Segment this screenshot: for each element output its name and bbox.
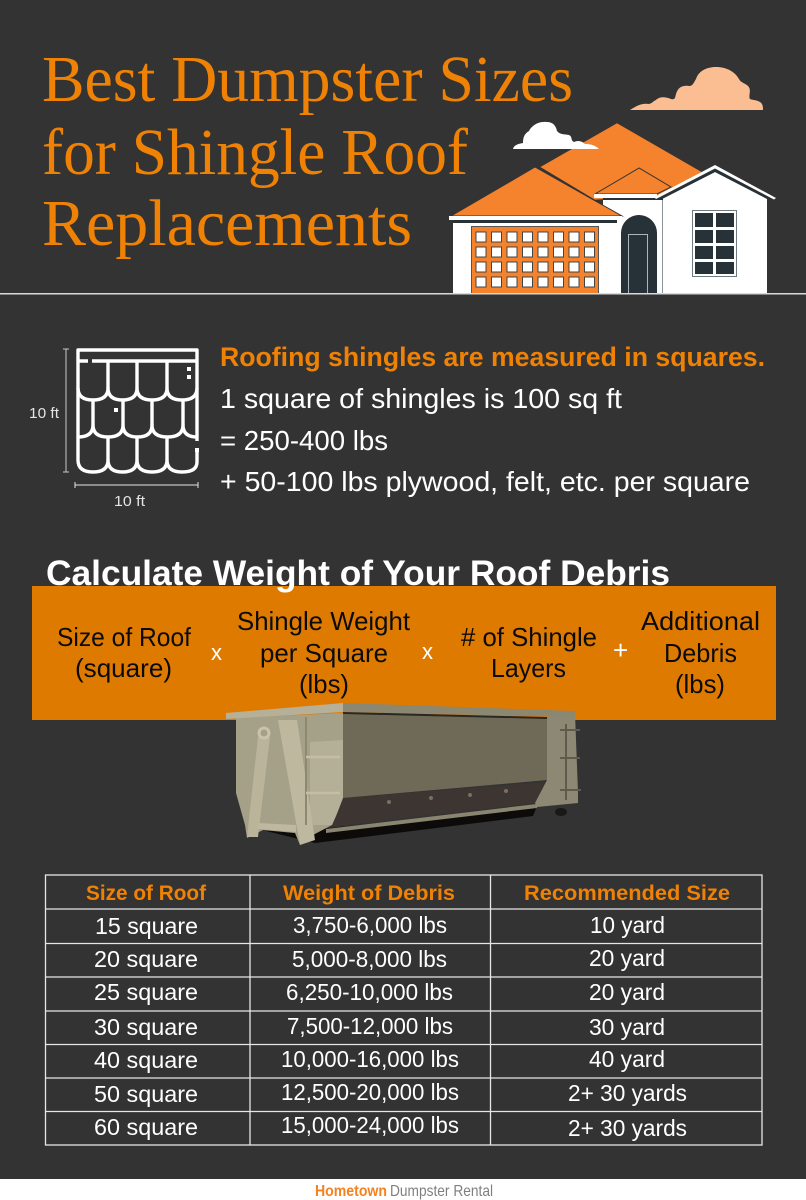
dimension: width: 10 ft bbox=[114, 493, 146, 510]
formula: shingle weight: (lbs) bbox=[299, 669, 349, 699]
column: size of roof: 25 square bbox=[94, 979, 198, 1005]
formula: size of roof: Size of Roof bbox=[57, 622, 192, 652]
column: recommended size: 20 yard bbox=[589, 979, 665, 1005]
text block: shingle measurement: = 250-400 lbs bbox=[220, 425, 388, 456]
table header: Weight of Debris bbox=[283, 882, 455, 905]
dumpster rear end bbox=[535, 713, 578, 807]
column: size of roof bbox=[94, 913, 198, 1140]
column: recommended size: 40 yard bbox=[589, 1046, 665, 1072]
right wall bbox=[662, 172, 767, 293]
column: recommended size bbox=[568, 912, 687, 1141]
column: weight of debris: 10,000-16,000 lbs bbox=[281, 1046, 459, 1072]
text block: shingle measurement: 1 square of shingles is 100 sq ft bbox=[220, 383, 622, 414]
dumpster bolts bbox=[387, 789, 508, 804]
formula: additional debris: Additional bbox=[641, 606, 760, 636]
dumpster hoist arms bbox=[247, 737, 270, 837]
footer: brand strip: Dumpster Rental bbox=[390, 1183, 493, 1200]
table header: Recommended Size bbox=[524, 882, 730, 905]
title: Best Dumpster Sizes bbox=[42, 43, 573, 116]
dumpster end face bbox=[236, 713, 343, 845]
operator: times: x bbox=[211, 640, 222, 665]
garage eave bbox=[449, 216, 622, 220]
column: size of roof: 15 square bbox=[95, 913, 198, 939]
column: weight of debris: 15,000-24,000 lbs bbox=[281, 1112, 459, 1138]
column: weight of debris: 7,500-12,000 lbs bbox=[287, 1013, 453, 1039]
column: recommended size: 30 yard bbox=[589, 1014, 665, 1040]
illustration: dumpster bbox=[226, 703, 581, 845]
formula: shingle layers: # of Shingle bbox=[461, 622, 597, 652]
column: recommended size: 10 yard bbox=[590, 912, 665, 938]
garage wall bbox=[453, 222, 617, 293]
panel: weight formula band bbox=[32, 586, 776, 720]
formula: shingle layers bbox=[461, 622, 597, 683]
operator: times: x bbox=[422, 639, 433, 664]
text block: shingle measurement: Roofing shingles are measured in squares. bbox=[220, 342, 765, 372]
title bbox=[42, 43, 573, 260]
dimension: width bbox=[75, 482, 198, 510]
garage roof bbox=[451, 167, 622, 216]
formula: additional debris: (lbs) bbox=[675, 669, 725, 699]
column: size of roof: 40 square bbox=[94, 1047, 198, 1073]
column: size of roof: 20 square bbox=[94, 946, 198, 972]
formula: shingle layers: Layers bbox=[491, 653, 566, 683]
column: size of roof: 30 square bbox=[94, 1014, 198, 1040]
garage door bbox=[472, 226, 598, 294]
dumpster rail bbox=[326, 804, 537, 833]
icon: peach cloud bbox=[630, 67, 763, 110]
column: weight of debris: 12,500-20,000 lbs bbox=[281, 1079, 459, 1105]
column: weight of debris: 6,250-10,000 lbs bbox=[286, 979, 453, 1005]
column: weight of debris: 5,000-8,000 lbs bbox=[292, 946, 447, 972]
table grid bbox=[46, 875, 762, 1145]
dimension: height: 10 ft bbox=[29, 405, 60, 422]
dumpster side shadow bbox=[262, 806, 537, 843]
heading: calculate weight: Calculate Weight of Your Roof Debris bbox=[46, 554, 670, 593]
illustration: house bbox=[449, 122, 776, 293]
back roof bbox=[540, 123, 702, 200]
icon: shingle square diagram bbox=[78, 350, 199, 472]
right gable trim bbox=[660, 168, 771, 200]
dumpster rear hinges bbox=[560, 724, 581, 800]
front door arch bbox=[621, 215, 657, 294]
title: for Shingle Roof bbox=[42, 116, 468, 189]
dumpster side panel bbox=[343, 713, 547, 798]
operator: plus: + bbox=[613, 635, 628, 665]
dumpster top rim bbox=[226, 703, 343, 719]
column: recommended size: 2+ 30 yards bbox=[568, 1080, 687, 1106]
dimension: height bbox=[29, 349, 69, 472]
column: recommended size: 2+ 30 yards bbox=[568, 1115, 687, 1141]
table: debris by roof size bbox=[46, 875, 762, 1145]
column: recommended size: 20 yard bbox=[589, 945, 665, 971]
middle wall bbox=[603, 200, 663, 293]
column: size of roof: 60 square bbox=[94, 1114, 198, 1140]
formula: shingle weight bbox=[237, 606, 411, 699]
table header bbox=[86, 882, 730, 905]
dumpster end highlight panel bbox=[310, 740, 343, 825]
formula: size of roof: (square) bbox=[75, 653, 172, 683]
window bbox=[692, 210, 736, 276]
formula: shingle weight: per Square bbox=[260, 638, 388, 668]
icon: white cloud bbox=[513, 122, 599, 149]
footer: brand strip bbox=[0, 1179, 806, 1200]
column: weight of debris bbox=[281, 912, 459, 1138]
small gable roof bbox=[595, 168, 671, 194]
formula: additional debris bbox=[641, 606, 760, 699]
text block: shingle measurement bbox=[220, 342, 765, 497]
dumpster lower dark panel bbox=[332, 782, 545, 827]
title: Replacements bbox=[42, 187, 412, 260]
table header: Size of Roof bbox=[86, 882, 207, 905]
small gable eave bbox=[594, 194, 657, 198]
column: weight of debris: 3,750-6,000 lbs bbox=[293, 912, 447, 938]
formula: additional debris: Debris bbox=[664, 638, 737, 668]
footer: brand strip: Hometown bbox=[315, 1183, 387, 1200]
column: size of roof: 50 square bbox=[94, 1081, 198, 1107]
divider line bbox=[0, 293, 806, 294]
text block: shingle measurement: + 50-100 lbs plywood, felt, etc. per square bbox=[220, 466, 750, 497]
formula: size of roof bbox=[57, 622, 192, 683]
formula: shingle weight: Shingle Weight bbox=[237, 606, 411, 636]
